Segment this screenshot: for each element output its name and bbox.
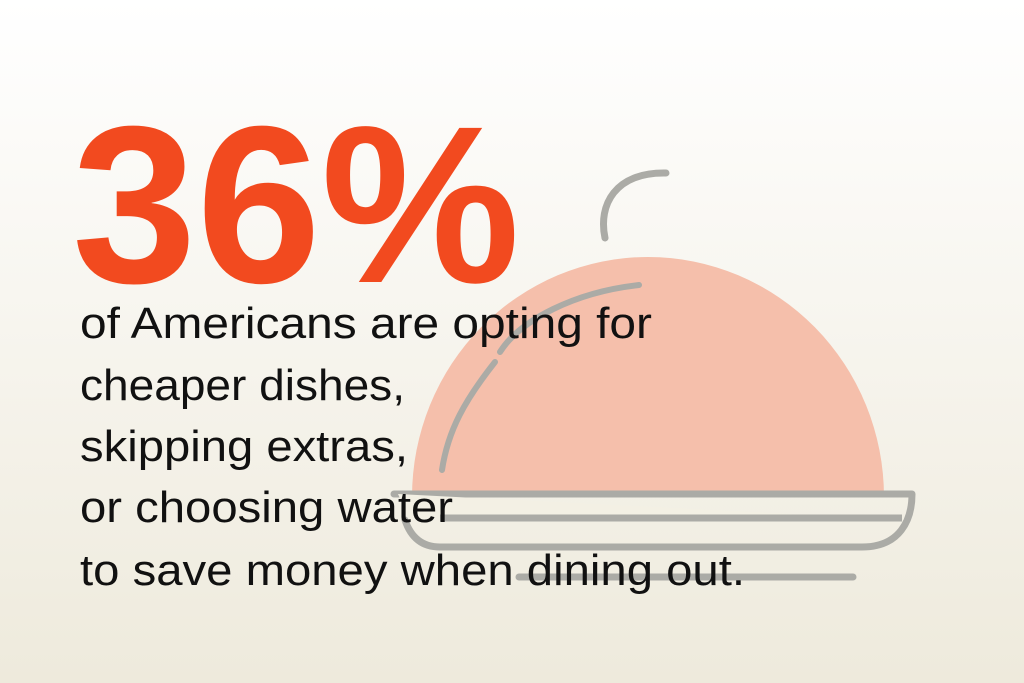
headline number: 36% (72, 80, 520, 330)
body text: to save money when dining out. (80, 546, 745, 595)
body text: skipping extras, (80, 422, 408, 471)
icon: serving cloche (394, 173, 912, 577)
body text: or choosing water (80, 483, 453, 532)
cloche dome (412, 257, 884, 497)
body text: of Americans are opting for (80, 299, 652, 348)
plate (394, 494, 912, 547)
body text: cheaper dishes, (80, 361, 405, 410)
body text (80, 299, 745, 595)
cloche handle (603, 173, 666, 238)
dome highlight (442, 285, 639, 470)
plate shadow line (519, 574, 853, 580)
